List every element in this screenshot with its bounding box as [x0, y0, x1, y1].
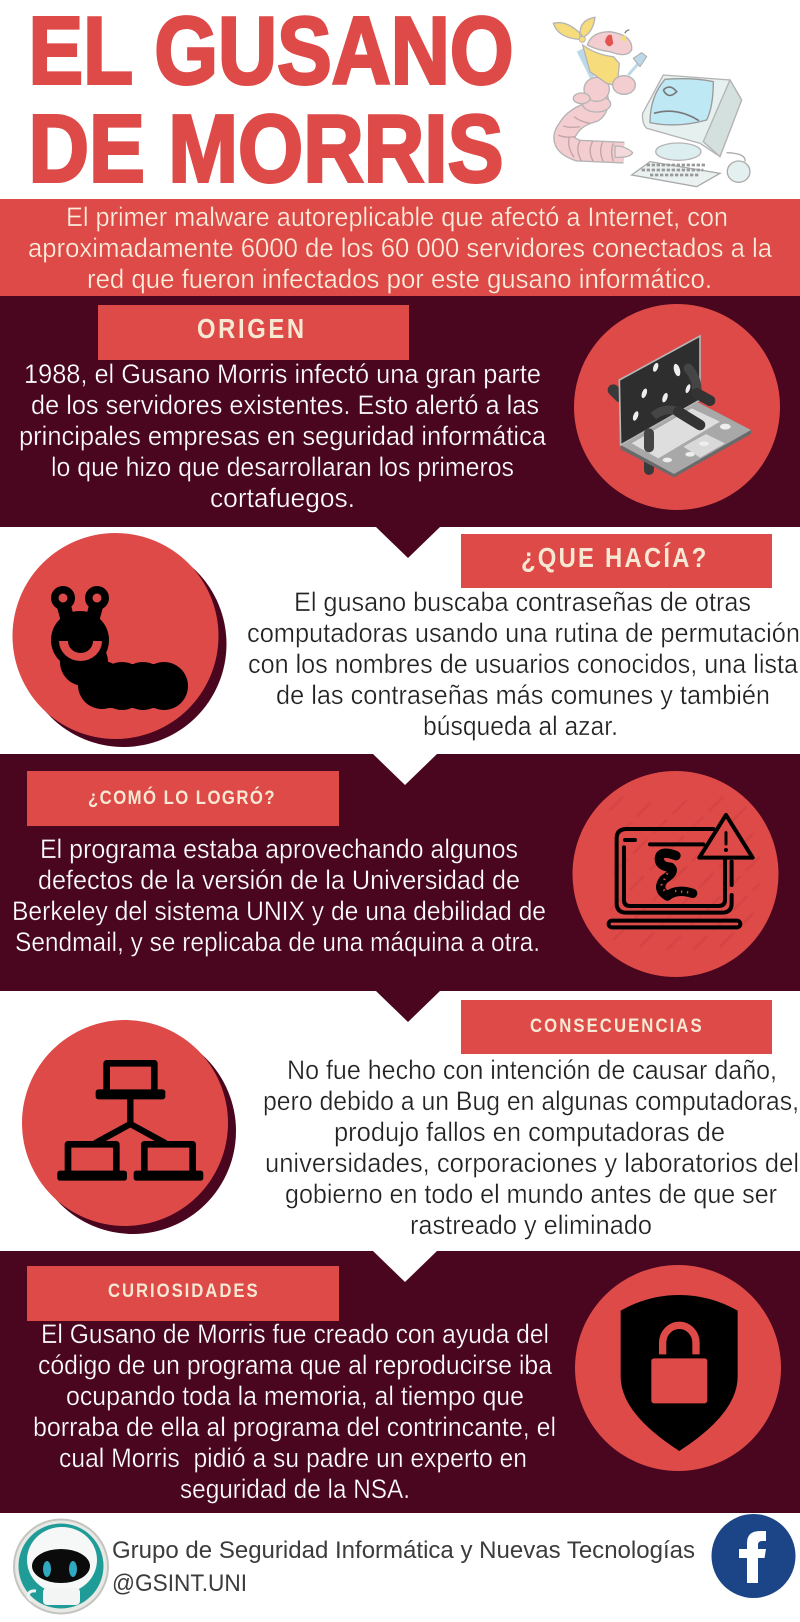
- panel: curiosidades: [0, 1251, 800, 1513]
- logo: robot: [14, 1520, 108, 1614]
- text: como lo logro: Sendmail, y se replicaba de una máquina a otra.: [15, 927, 540, 957]
- text: curiosidades: código de un programa que al reproducirse iba: [38, 1350, 553, 1380]
- icon: worm on screen with warning: [572, 771, 778, 977]
- heading: consecuencias: CONSECUENCIAS: [530, 1015, 702, 1036]
- panel: introduction: [0, 199, 800, 296]
- panel: consecuencias: [22, 991, 799, 1240]
- icon: worm: [12, 533, 226, 747]
- heading: como lo logro: [27, 771, 339, 826]
- text: origen: de los servidores existentes. Esto alertó a las: [31, 390, 539, 420]
- text: que hacia: El gusano buscaba contraseñas de otras: [294, 587, 751, 617]
- panel: como lo logro: [0, 754, 800, 991]
- icon: infected laptop: [574, 304, 780, 510]
- text: origen: principales empresas en seguridad informática: [19, 421, 547, 451]
- icon: network: [22, 1020, 236, 1234]
- text: origen: cortafuegos.: [210, 483, 355, 513]
- text: origen: lo que hizo que desarrollaran los primeros: [51, 452, 514, 482]
- text: como lo logro: [12, 834, 546, 957]
- heading: origen: [98, 305, 409, 360]
- text: que hacia: [247, 587, 800, 741]
- heading: origen: ORIGEN: [197, 312, 304, 344]
- panel: que hacia: [12, 533, 800, 747]
- text: como lo logro: El programa estaba aprovechando algunos: [40, 834, 518, 864]
- text: group name: [112, 1537, 695, 1597]
- text: consecuencias: [263, 1055, 799, 1240]
- text: group name: Grupo de Seguridad Informática y Nuevas Tecnologías: [112, 1537, 695, 1564]
- heading: consecuencias: [461, 1000, 772, 1054]
- heading: curiosidades: [27, 1266, 339, 1321]
- text: origen: [19, 359, 547, 513]
- footer: [14, 1514, 796, 1614]
- title: DE MORRIS: [28, 96, 504, 202]
- text: curiosidades: El Gusano de Morris fue creado con ayuda del: [41, 1319, 549, 1349]
- icon: facebook: [712, 1514, 796, 1598]
- panel: introduction: El primer malware autoreplicable que afectó a Internet, con: [66, 202, 728, 232]
- title: EL GUSANO: [28, 0, 514, 104]
- heading: que hacia: ¿QUE HACÍA?: [521, 541, 706, 573]
- text: origen: 1988, el Gusano Morris infectó una gran parte: [24, 359, 541, 389]
- text: curiosidades: seguridad de la NSA.: [180, 1474, 410, 1504]
- text: como lo logro: defectos de la versión de la Universidad de: [38, 865, 520, 895]
- heading: curiosidades: CURIOSIDADES: [108, 1280, 258, 1301]
- panel: introduction: aproximadamente 6000 de los 60 000 servidores conectados a la: [28, 233, 773, 263]
- text: group name: @GSINT.UNI: [112, 1570, 247, 1597]
- text: consecuencias: produjo fallos en computadoras de: [334, 1117, 725, 1147]
- illustration: worm and sad computer: [553, 17, 750, 187]
- text: que hacia: de las contraseñas más comunes y también: [276, 680, 770, 710]
- text: curiosidades: ocupando toda la memoria, al tiempo que: [66, 1381, 524, 1411]
- title: [28, 0, 514, 202]
- heading: que hacia: [461, 534, 772, 588]
- text: consecuencias: gobierno en todo el mundo antes de que ser: [285, 1179, 777, 1209]
- text: como lo logro: Berkeley del sistema UNIX y de una debilidad de: [12, 896, 546, 926]
- heading: como lo logro: ¿COMÓ LO LOGRÓ?: [88, 786, 275, 808]
- text: que hacia: búsqueda al azar.: [423, 711, 618, 741]
- icon: shield with padlock: [575, 1265, 781, 1471]
- text: curiosidades: cual Morris pidió a su padre un experto en: [59, 1443, 527, 1473]
- text: consecuencias: No fue hecho con intención de causar daño,: [287, 1055, 777, 1085]
- panel: origen: [0, 296, 800, 558]
- text: curiosidades: borraba de ella al programa del contrincante, el: [33, 1412, 556, 1442]
- panel: introduction: red que fueron infectados por este gusano informático.: [87, 264, 712, 294]
- text: curiosidades: [33, 1319, 556, 1504]
- text: consecuencias: rastreado y eliminado: [410, 1210, 652, 1240]
